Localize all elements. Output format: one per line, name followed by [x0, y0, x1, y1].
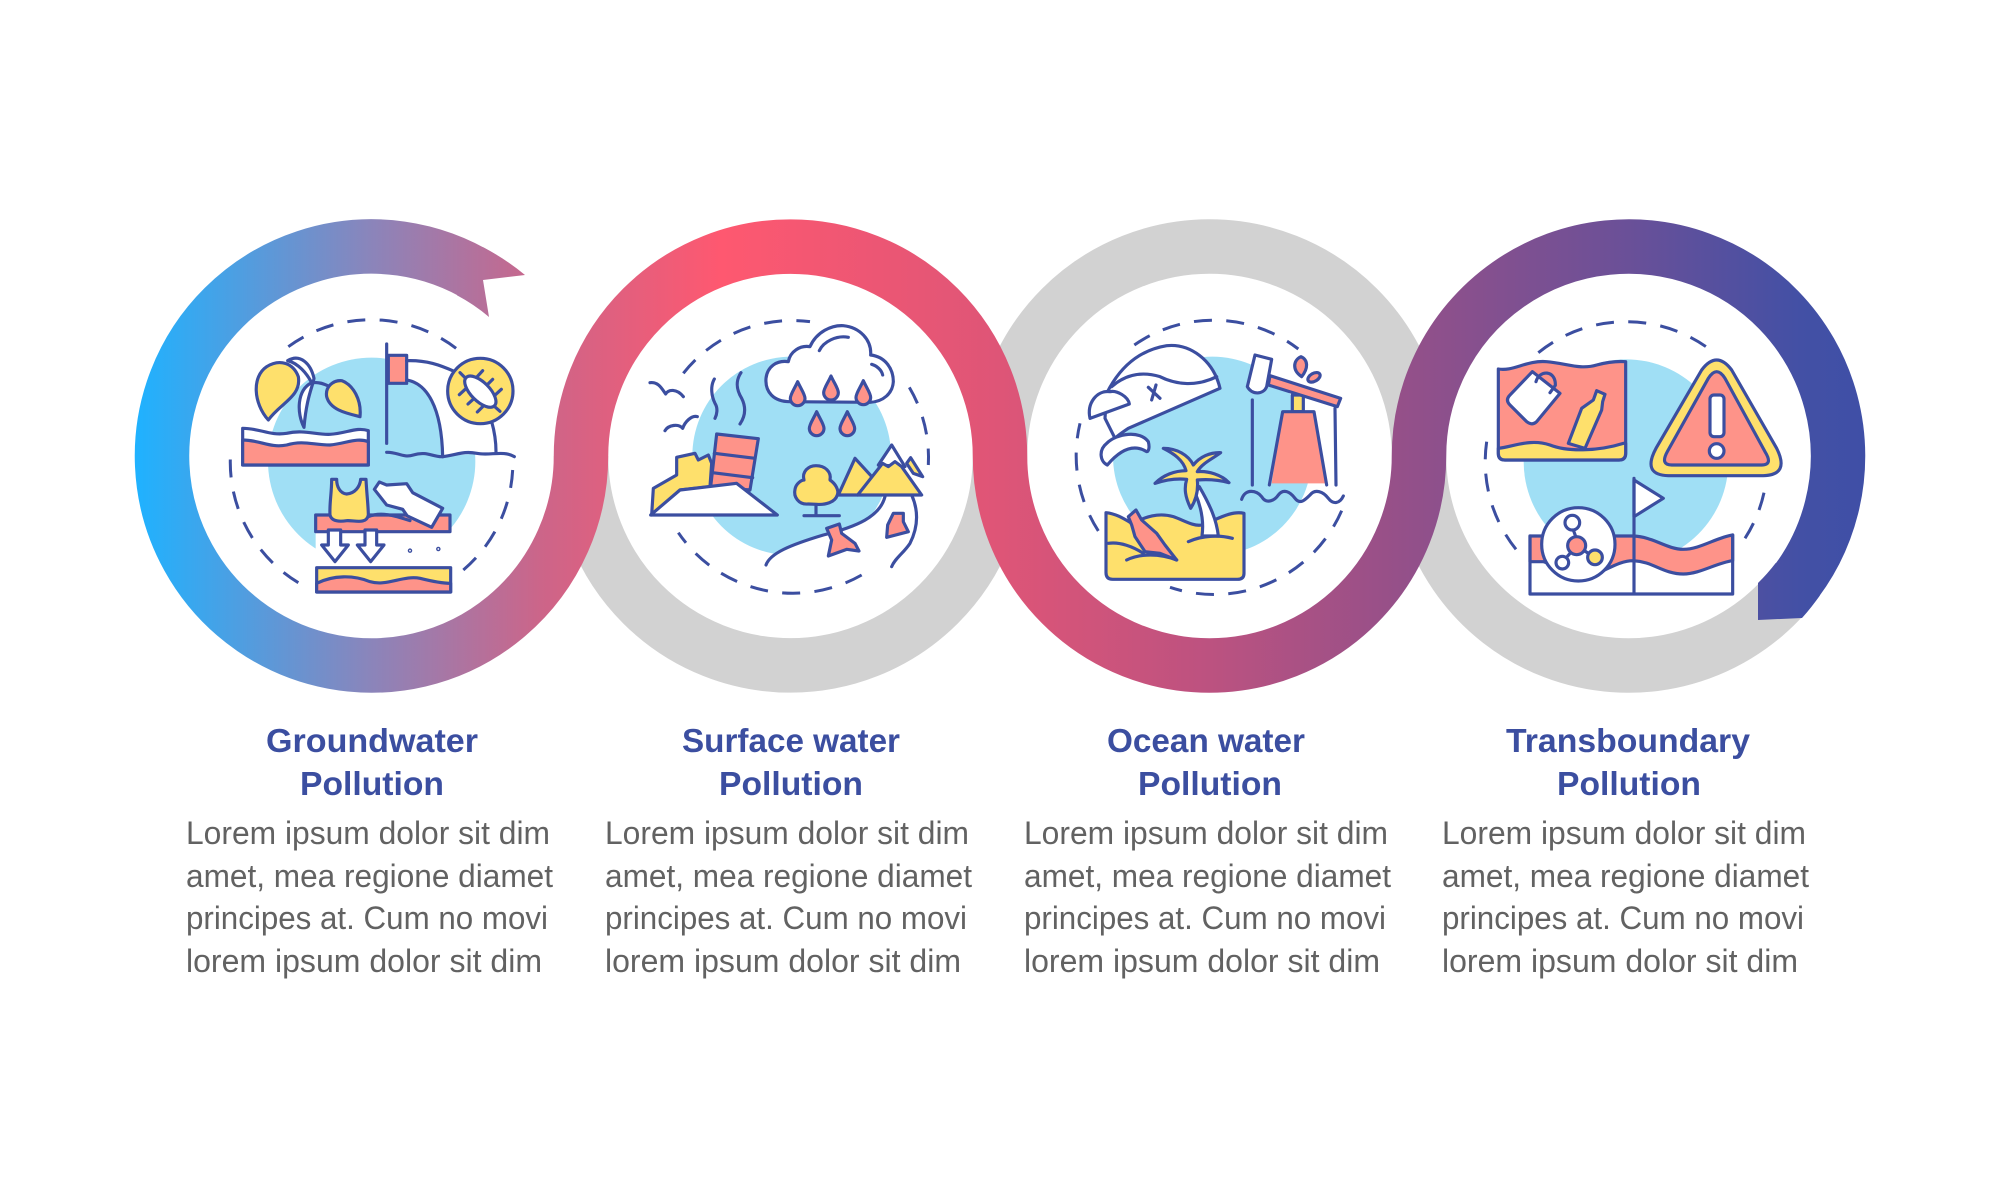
- river banks: [766, 495, 916, 567]
- body text: Lorem ipsum dolor sit dim: [605, 815, 969, 851]
- palm tree: [1155, 448, 1232, 542]
- blue backdrop circle: [1113, 357, 1312, 555]
- lower slab: [317, 568, 451, 592]
- border ground: [1530, 535, 1733, 594]
- barrel: [711, 434, 758, 490]
- plastic bag: [330, 479, 368, 521]
- upper slab: [316, 514, 450, 532]
- bag: [1507, 372, 1560, 424]
- body text: amet, mea regione diamet: [1024, 858, 1391, 894]
- white cover below slab: [316, 532, 452, 595]
- body text: lorem ipsum dolor sit dim: [186, 943, 542, 979]
- icon: surface water pollution: [650, 321, 929, 593]
- polluted water map: [1498, 361, 1626, 460]
- oil pump: [1247, 355, 1341, 485]
- body text: amet, mea regione diamet: [605, 858, 972, 894]
- heading: Groundwater: [266, 722, 478, 759]
- tree: [795, 466, 839, 516]
- icon: transboundary pollution: [1485, 322, 1781, 594]
- body text: lorem ipsum dolor sit dim: [605, 943, 961, 979]
- body text: Lorem ipsum dolor sit dim: [1024, 815, 1388, 851]
- dashed ring: [1076, 320, 1342, 595]
- body text: Lorem ipsum dolor sit dim: [1442, 815, 1806, 851]
- icon: ocean water pollution: [1076, 320, 1343, 595]
- heading: Pollution: [1138, 765, 1282, 802]
- blue backdrop circle: [268, 358, 475, 565]
- oil spill: [1128, 510, 1177, 560]
- plastic bottle: [374, 482, 443, 527]
- mountains: [838, 445, 923, 495]
- blue backdrop circle: [1524, 359, 1728, 564]
- floating litter: [827, 513, 908, 556]
- body text: Lorem ipsum dolor sit dim: [186, 815, 550, 851]
- body text: principes at. Cum no movi: [186, 900, 548, 936]
- body text: amet, mea regione diamet: [1442, 858, 1809, 894]
- garbage heap: [651, 453, 777, 515]
- birds: [650, 383, 697, 431]
- dashed ring: [230, 320, 513, 583]
- gradient ribbon with arrow ends: [162, 246, 1838, 666]
- body text: [1442, 815, 1809, 979]
- heading: [266, 722, 478, 802]
- warning sign: [1651, 360, 1781, 476]
- waves: [1242, 491, 1343, 503]
- bottle: [1568, 391, 1605, 448]
- sprout: [256, 358, 360, 427]
- heading: Pollution: [1557, 765, 1701, 802]
- border flag: [1634, 478, 1663, 593]
- river: [766, 495, 916, 567]
- icon: groundwater pollution: [230, 320, 514, 595]
- body text: principes at. Cum no movi: [1024, 900, 1386, 936]
- body text: lorem ipsum dolor sit dim: [1024, 943, 1380, 979]
- body text: [605, 815, 972, 979]
- body text: principes at. Cum no movi: [605, 900, 967, 936]
- rain cloud: [766, 326, 893, 402]
- heading: Ocean water: [1107, 722, 1305, 759]
- smoke: [712, 373, 745, 424]
- column 4: transboundary text: [1442, 722, 1809, 979]
- dashed ring: [1485, 322, 1764, 549]
- outflow pipe: [387, 344, 514, 457]
- body text: amet, mea regione diamet: [186, 858, 553, 894]
- body text: principes at. Cum no movi: [1442, 900, 1804, 936]
- heading: Surface water: [682, 722, 900, 759]
- dead whale: [1089, 345, 1220, 465]
- heading: Transboundary: [1506, 722, 1751, 759]
- heading: [1506, 722, 1751, 802]
- heading: [1107, 722, 1305, 802]
- bacteria badge: [448, 358, 513, 424]
- heading: Pollution: [719, 765, 863, 802]
- column 2: surface water text: [605, 722, 972, 979]
- blue backdrop circle: [692, 357, 891, 555]
- heading: Pollution: [300, 765, 444, 802]
- body text: lorem ipsum dolor sit dim: [1442, 943, 1798, 979]
- body text: [186, 815, 553, 979]
- dashed ring: [678, 321, 929, 593]
- beach sand: [1106, 513, 1244, 579]
- molecule badge: [1542, 508, 1615, 581]
- rain drops: [790, 376, 871, 436]
- down arrows: [322, 530, 439, 562]
- body text: [1024, 815, 1391, 979]
- column 3: ocean water text: [1024, 722, 1391, 979]
- heading: [682, 722, 900, 802]
- soil block: [243, 428, 368, 465]
- grey ring segments: [581, 246, 1784, 666]
- column 1: groundwater text: [186, 722, 553, 979]
